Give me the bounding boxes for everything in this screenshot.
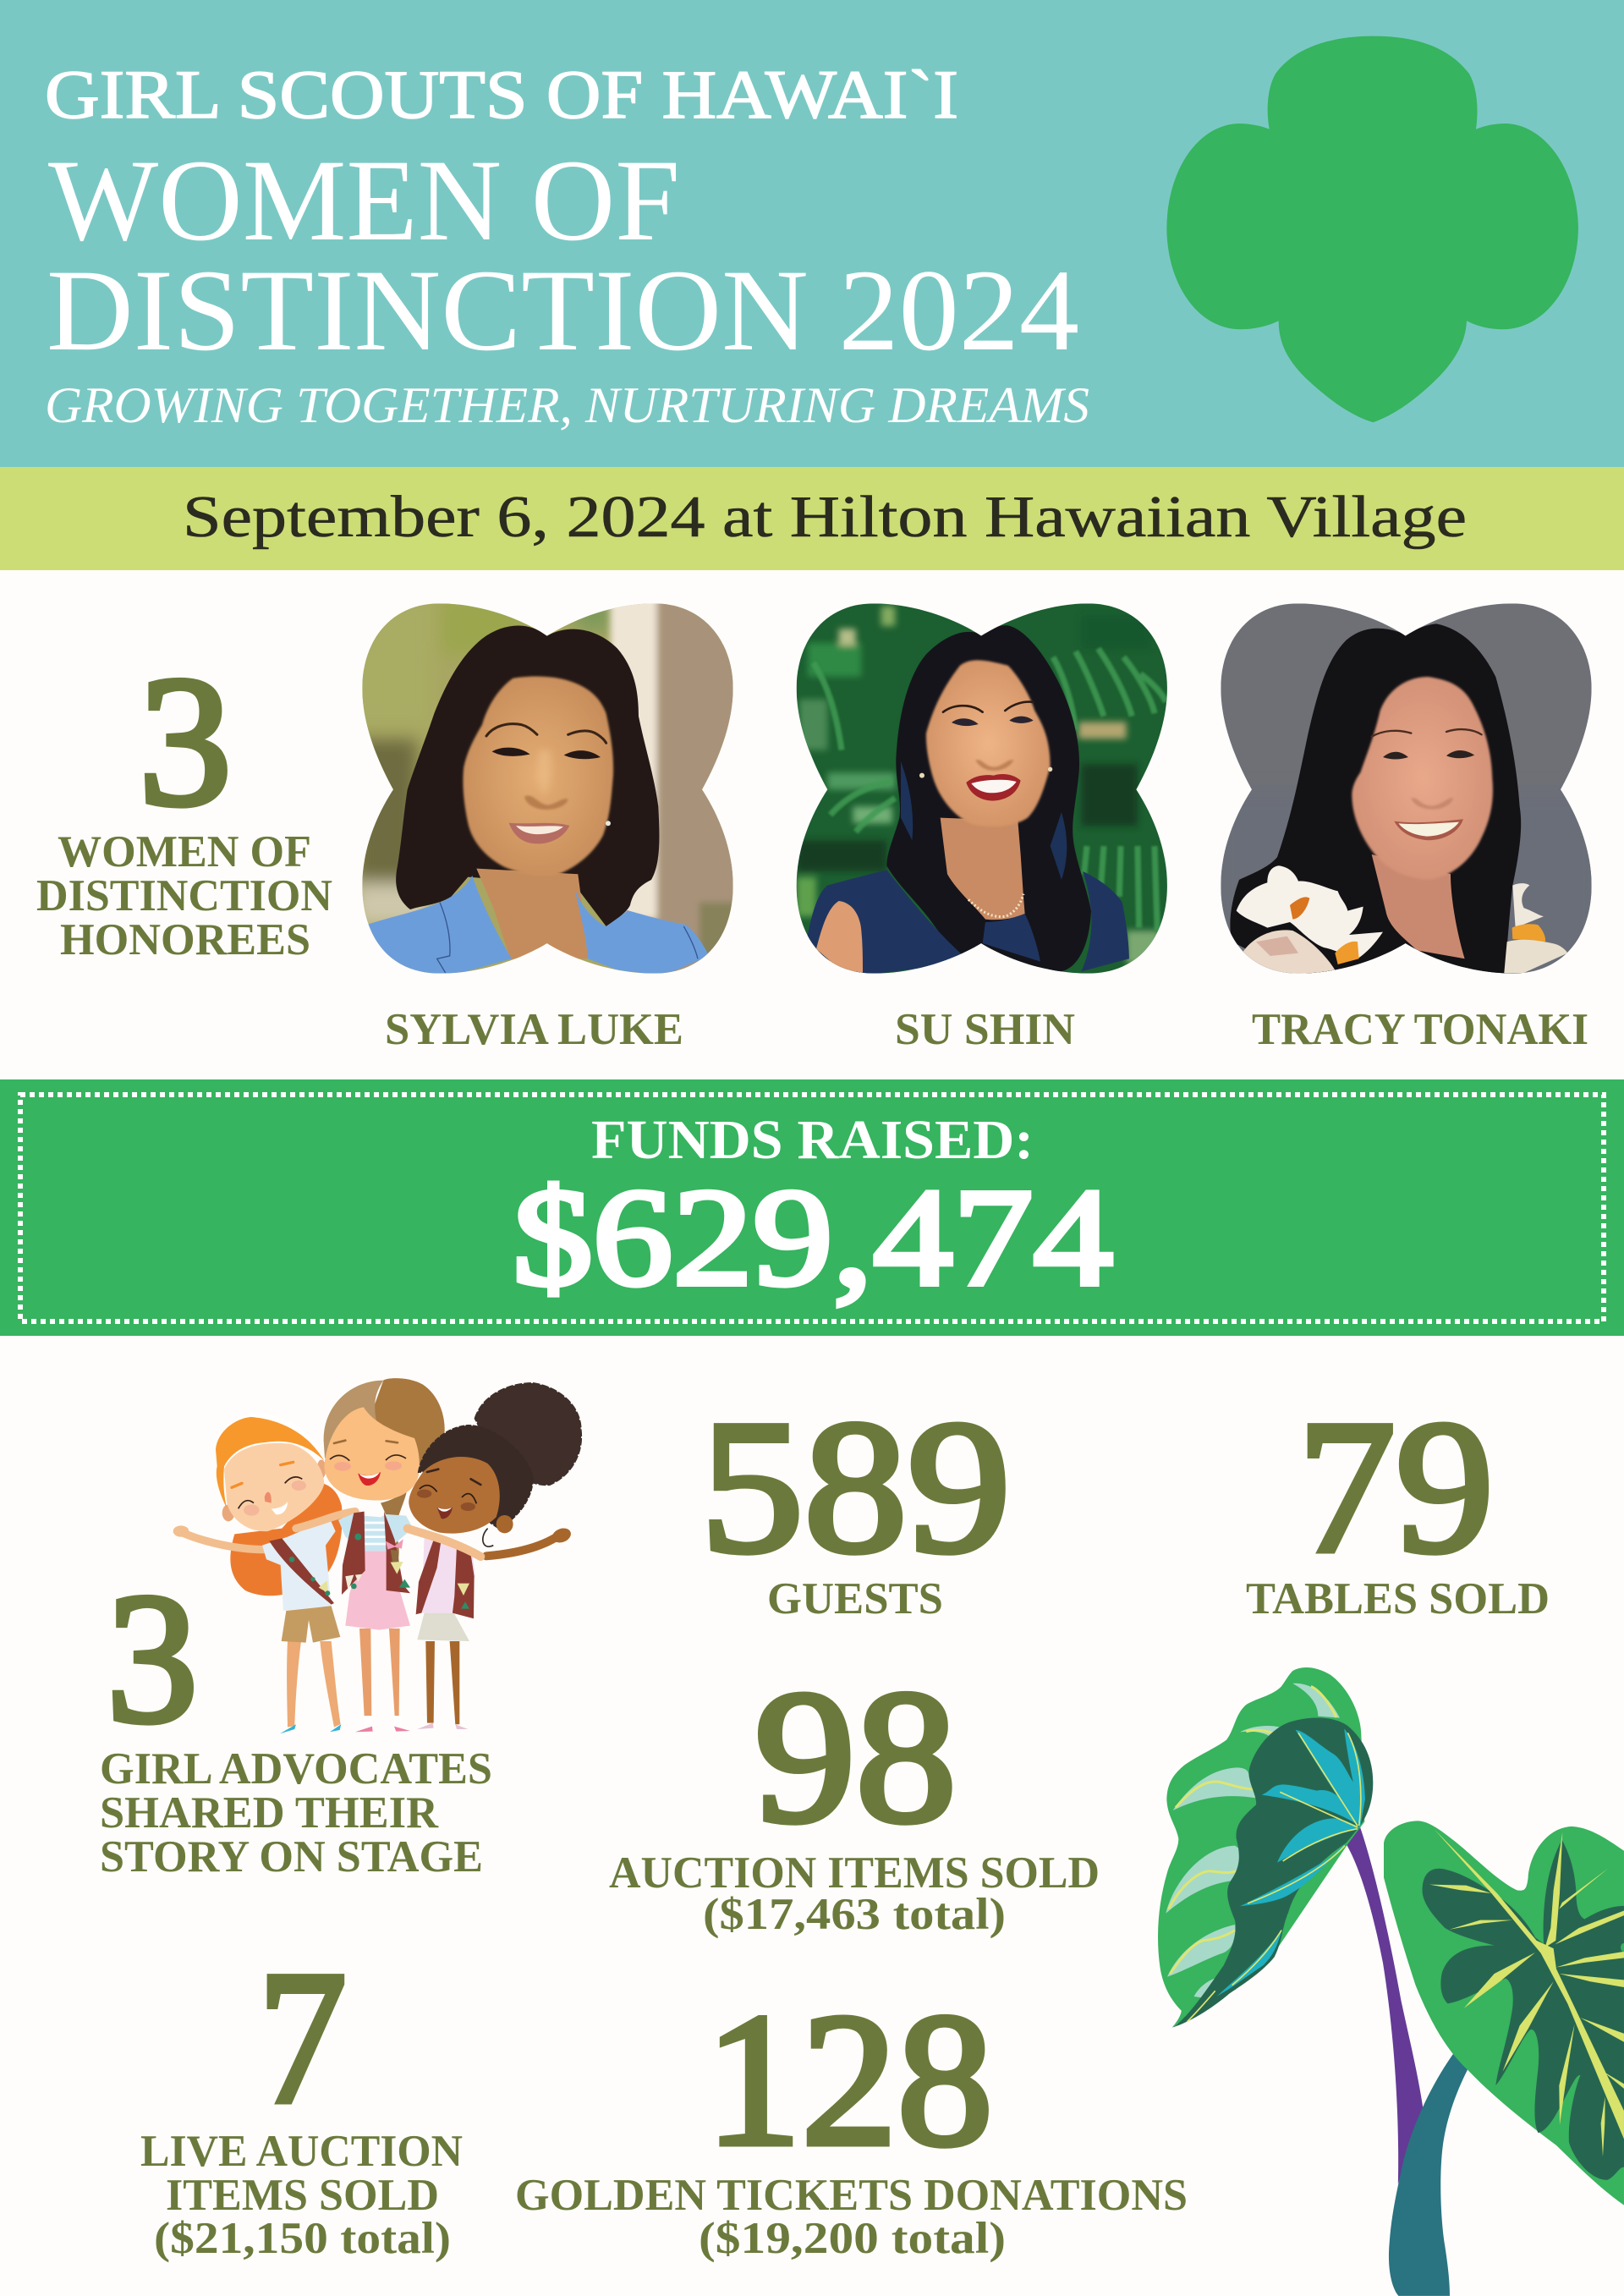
photo: Sylvia Luke — [362, 603, 733, 974]
stat: tables sold: TABLES SOLD — [1246, 1574, 1550, 1623]
stat: live auction items: ITEMS SOLD — [166, 2171, 439, 2220]
stat: golden tickets: GOLDEN TICKETS DONATIONS — [515, 2171, 1188, 2220]
middle girl body — [338, 1512, 413, 1732]
funds amount: $629,474 — [513, 1160, 1113, 1315]
photo: Su Shin — [785, 592, 1186, 981]
neck — [1372, 854, 1465, 958]
lei flowers — [1237, 865, 1567, 975]
right girl head — [409, 1425, 533, 1546]
honoree names: SYLVIA LUKE — [385, 1005, 683, 1054]
big number: girl advocates: GIRL ADVOCATES — [100, 1744, 492, 1793]
dress — [806, 870, 1129, 975]
face — [463, 676, 613, 876]
face — [926, 660, 1051, 827]
big number: girl advocates: STORY ON STAGE — [100, 1832, 483, 1881]
arm — [816, 901, 863, 973]
date and venue band: September 6, 2024 at Hilton Hawaiian Village — [183, 485, 1467, 550]
stat: honorees: HONOREES — [60, 915, 310, 964]
smile — [1394, 819, 1463, 840]
neck and chest — [941, 818, 1025, 920]
teal stem — [1389, 2052, 1468, 2296]
mouth — [509, 823, 569, 843]
stat: tables sold — [1246, 1381, 1550, 1623]
stat: live auction items: 7 — [258, 1931, 347, 2143]
organisation name: GIRL SCOUTS OF HAWAI`I — [45, 56, 958, 133]
stat: honorees: 3 — [139, 638, 232, 844]
honoree names: SU SHIN — [895, 1005, 1075, 1054]
necklace — [968, 894, 1023, 917]
stat: guests: 589 — [700, 1381, 1011, 1592]
stat: golden tickets: ($19,200 total) — [699, 2214, 1006, 2263]
funds raised panel — [0, 1079, 1624, 1336]
honoree names — [385, 1005, 1588, 1054]
smile — [966, 774, 1021, 801]
big number: girl advocates — [100, 1555, 492, 1881]
stat: guests: GUESTS — [767, 1574, 943, 1623]
stat: honorees — [36, 638, 332, 964]
face — [1352, 677, 1493, 880]
hair — [1230, 623, 1521, 975]
big number: girl advocates: SHARED THEIR — [100, 1788, 439, 1837]
photo: Tracy Tonaki — [1214, 592, 1603, 981]
right leaf and teal stem — [1384, 1821, 1624, 2296]
right girl body — [408, 1526, 573, 1729]
blazer — [368, 876, 709, 975]
hair — [886, 625, 1091, 972]
stat: auction items sold — [609, 1651, 1100, 1939]
big number: girl advocates: 3 — [107, 1555, 198, 1761]
hair — [396, 626, 659, 926]
stat: honorees: DISTINCTION — [36, 871, 332, 920]
stat: golden tickets: 128 — [705, 1974, 993, 2185]
main title — [47, 135, 1079, 375]
left leaf — [1158, 1667, 1373, 2028]
honoree names: TRACY TONAKI — [1252, 1005, 1588, 1054]
purple stem — [1346, 1825, 1424, 2184]
stat: live auction items — [140, 1931, 463, 2263]
date and venue band — [0, 467, 1624, 570]
stat: auction items sold: 98 — [754, 1651, 957, 1862]
stat: tables sold: 79 — [1298, 1381, 1494, 1592]
icon: trefoil — [1166, 36, 1578, 422]
stat: honorees: WOMEN OF — [58, 827, 311, 876]
illustration: taro leaves — [1158, 1667, 1624, 2296]
nose — [524, 795, 568, 810]
stat: live auction items: ($21,150 total) — [154, 2214, 451, 2263]
main title: DISTINCTION 2024 — [47, 245, 1079, 375]
back hair and bun — [230, 1378, 581, 1596]
middle girl head — [324, 1407, 420, 1501]
main title: WOMEN OF — [48, 135, 680, 265]
left girl body — [173, 1512, 355, 1733]
left girl head — [216, 1414, 326, 1531]
stat: live auction items: LIVE AUCTION — [140, 2127, 463, 2176]
neck — [476, 869, 590, 958]
tagline: GROWING TOGETHER, NURTURING DREAMS — [45, 377, 1089, 433]
stat: auction items sold: AUCTION ITEMS SOLD — [609, 1848, 1100, 1898]
stat: golden tickets — [515, 1974, 1188, 2263]
illustration: three girl scouts — [173, 1378, 581, 1733]
stat: auction items sold: ($17,463 total) — [703, 1890, 1006, 1939]
funds label: FUNDS RAISED: — [591, 1109, 1034, 1171]
header panel — [0, 0, 1624, 467]
